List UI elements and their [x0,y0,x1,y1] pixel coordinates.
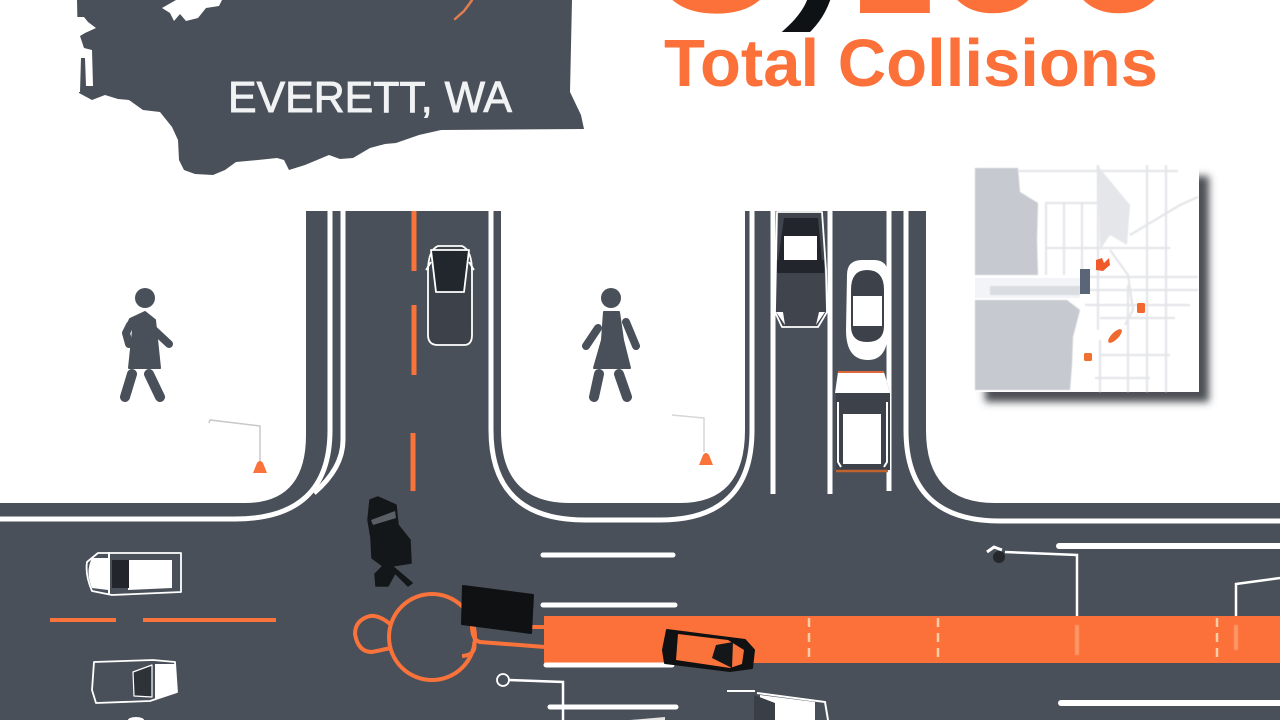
street lamp left [209,420,267,473]
car: bottom left lower [92,660,177,703]
traffic signal bottom centre [497,674,563,720]
icon: coast notch [77,17,96,92]
road centre line left [50,618,276,622]
sidewalk block left [0,205,306,503]
road edge lines [0,211,1280,521]
pier block [1080,269,1090,294]
state label: EVERETT, WA [228,73,513,122]
heading: total collisions: Total Collisions [664,26,1158,101]
traffic signal far right [1236,578,1280,616]
panel: inset city map [975,165,1209,402]
black overturned vehicle [368,497,412,586]
panel: Washington state map [77,0,584,175]
car: right lane three [835,372,890,471]
icon: orange Everett marker line [455,0,472,19]
pedestrian left [125,288,169,397]
car: orange on band [663,630,754,671]
car: road one [426,246,474,345]
road fragment bottom [630,717,665,720]
car: right lane one [775,212,827,327]
water bodies [975,168,1080,390]
sidewalk block right [926,205,1280,503]
road centre dashes [413,211,414,491]
sidewalk block middle [501,205,745,503]
pedestrian right [586,288,636,397]
big number [651,0,1185,61]
orange collision outline [355,594,545,680]
black vehicle [462,586,533,633]
orange collision corridor [544,616,1280,663]
street grid [1018,165,1198,392]
crash hot spots [1096,258,1110,271]
car: right lane two [846,260,888,360]
traffic signal right [987,547,1077,616]
panel: road network [0,205,1280,720]
small marker bottom left [128,717,144,720]
crosswalk stripes [543,546,1280,707]
car: bottom left upper [87,552,181,595]
icon: Puget Sound inlet [162,0,222,21]
car: bottom partial [727,691,828,720]
street lamp middle [672,415,713,465]
